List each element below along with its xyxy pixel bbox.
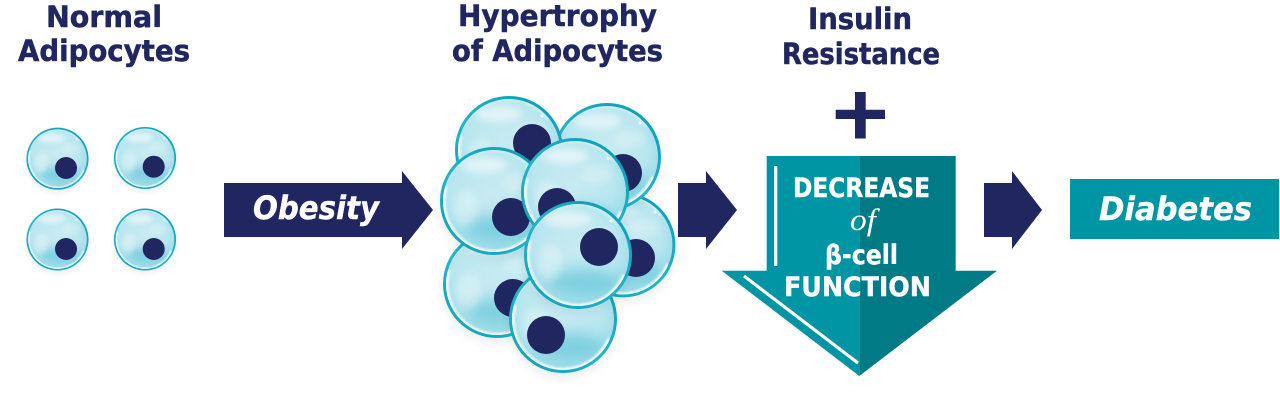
heading: Insulin Resistance [782,2,940,71]
icon: cell upper right [552,103,662,217]
heading: Hypertrophy of Adipocytes: of Adipocytes [452,34,663,68]
normal adipocyte cells [26,127,177,274]
heading: Hypertrophy of Adipocytes: Hypertrophy [458,0,657,33]
icon: cell lower right [570,193,676,303]
icon: cell lower left [442,230,552,344]
arrow: Obesity: Obesity [253,189,380,227]
outcome box: Diabetes [1070,179,1279,239]
down arrow: decrease of beta-cell function: β-cell [825,240,898,271]
icon: normal cell 3 [26,208,89,274]
arrow: to insulin resistance [678,171,737,249]
arrow: Obesity [224,171,433,249]
icon: cell top centre [520,138,630,252]
icon: normal cell 2 [113,127,177,192]
hypertrophic adipocyte cluster [439,96,676,379]
heading: Normal Adipocytes: Normal [46,0,162,34]
icon: cell middle left [439,147,549,261]
down arrow: decrease of beta-cell function: FUNCTION [784,272,931,303]
heading: Insulin Resistance: Resistance [782,37,940,71]
heading: Insulin Resistance: Insulin [808,2,912,36]
heading: Normal Adipocytes: Adipocytes [18,34,190,68]
icon: cell bottom [508,265,618,379]
arrow: to diabetes [984,171,1042,249]
heading: Normal Adipocytes [18,0,190,68]
down arrow: decrease of beta-cell function: of [850,202,881,237]
icon: plus [836,92,885,138]
icon: cell front [523,201,633,315]
icon: normal cell 4 [113,208,177,274]
down arrow: decrease of beta-cell function [722,156,997,376]
icon: cell upper left [454,96,564,210]
icon: normal cell 1 [26,128,89,193]
down arrow: decrease of beta-cell function: DECREASE [793,173,930,204]
outcome box: Diabetes: Diabetes [1099,190,1252,228]
heading: Hypertrophy of Adipocytes [452,0,663,68]
